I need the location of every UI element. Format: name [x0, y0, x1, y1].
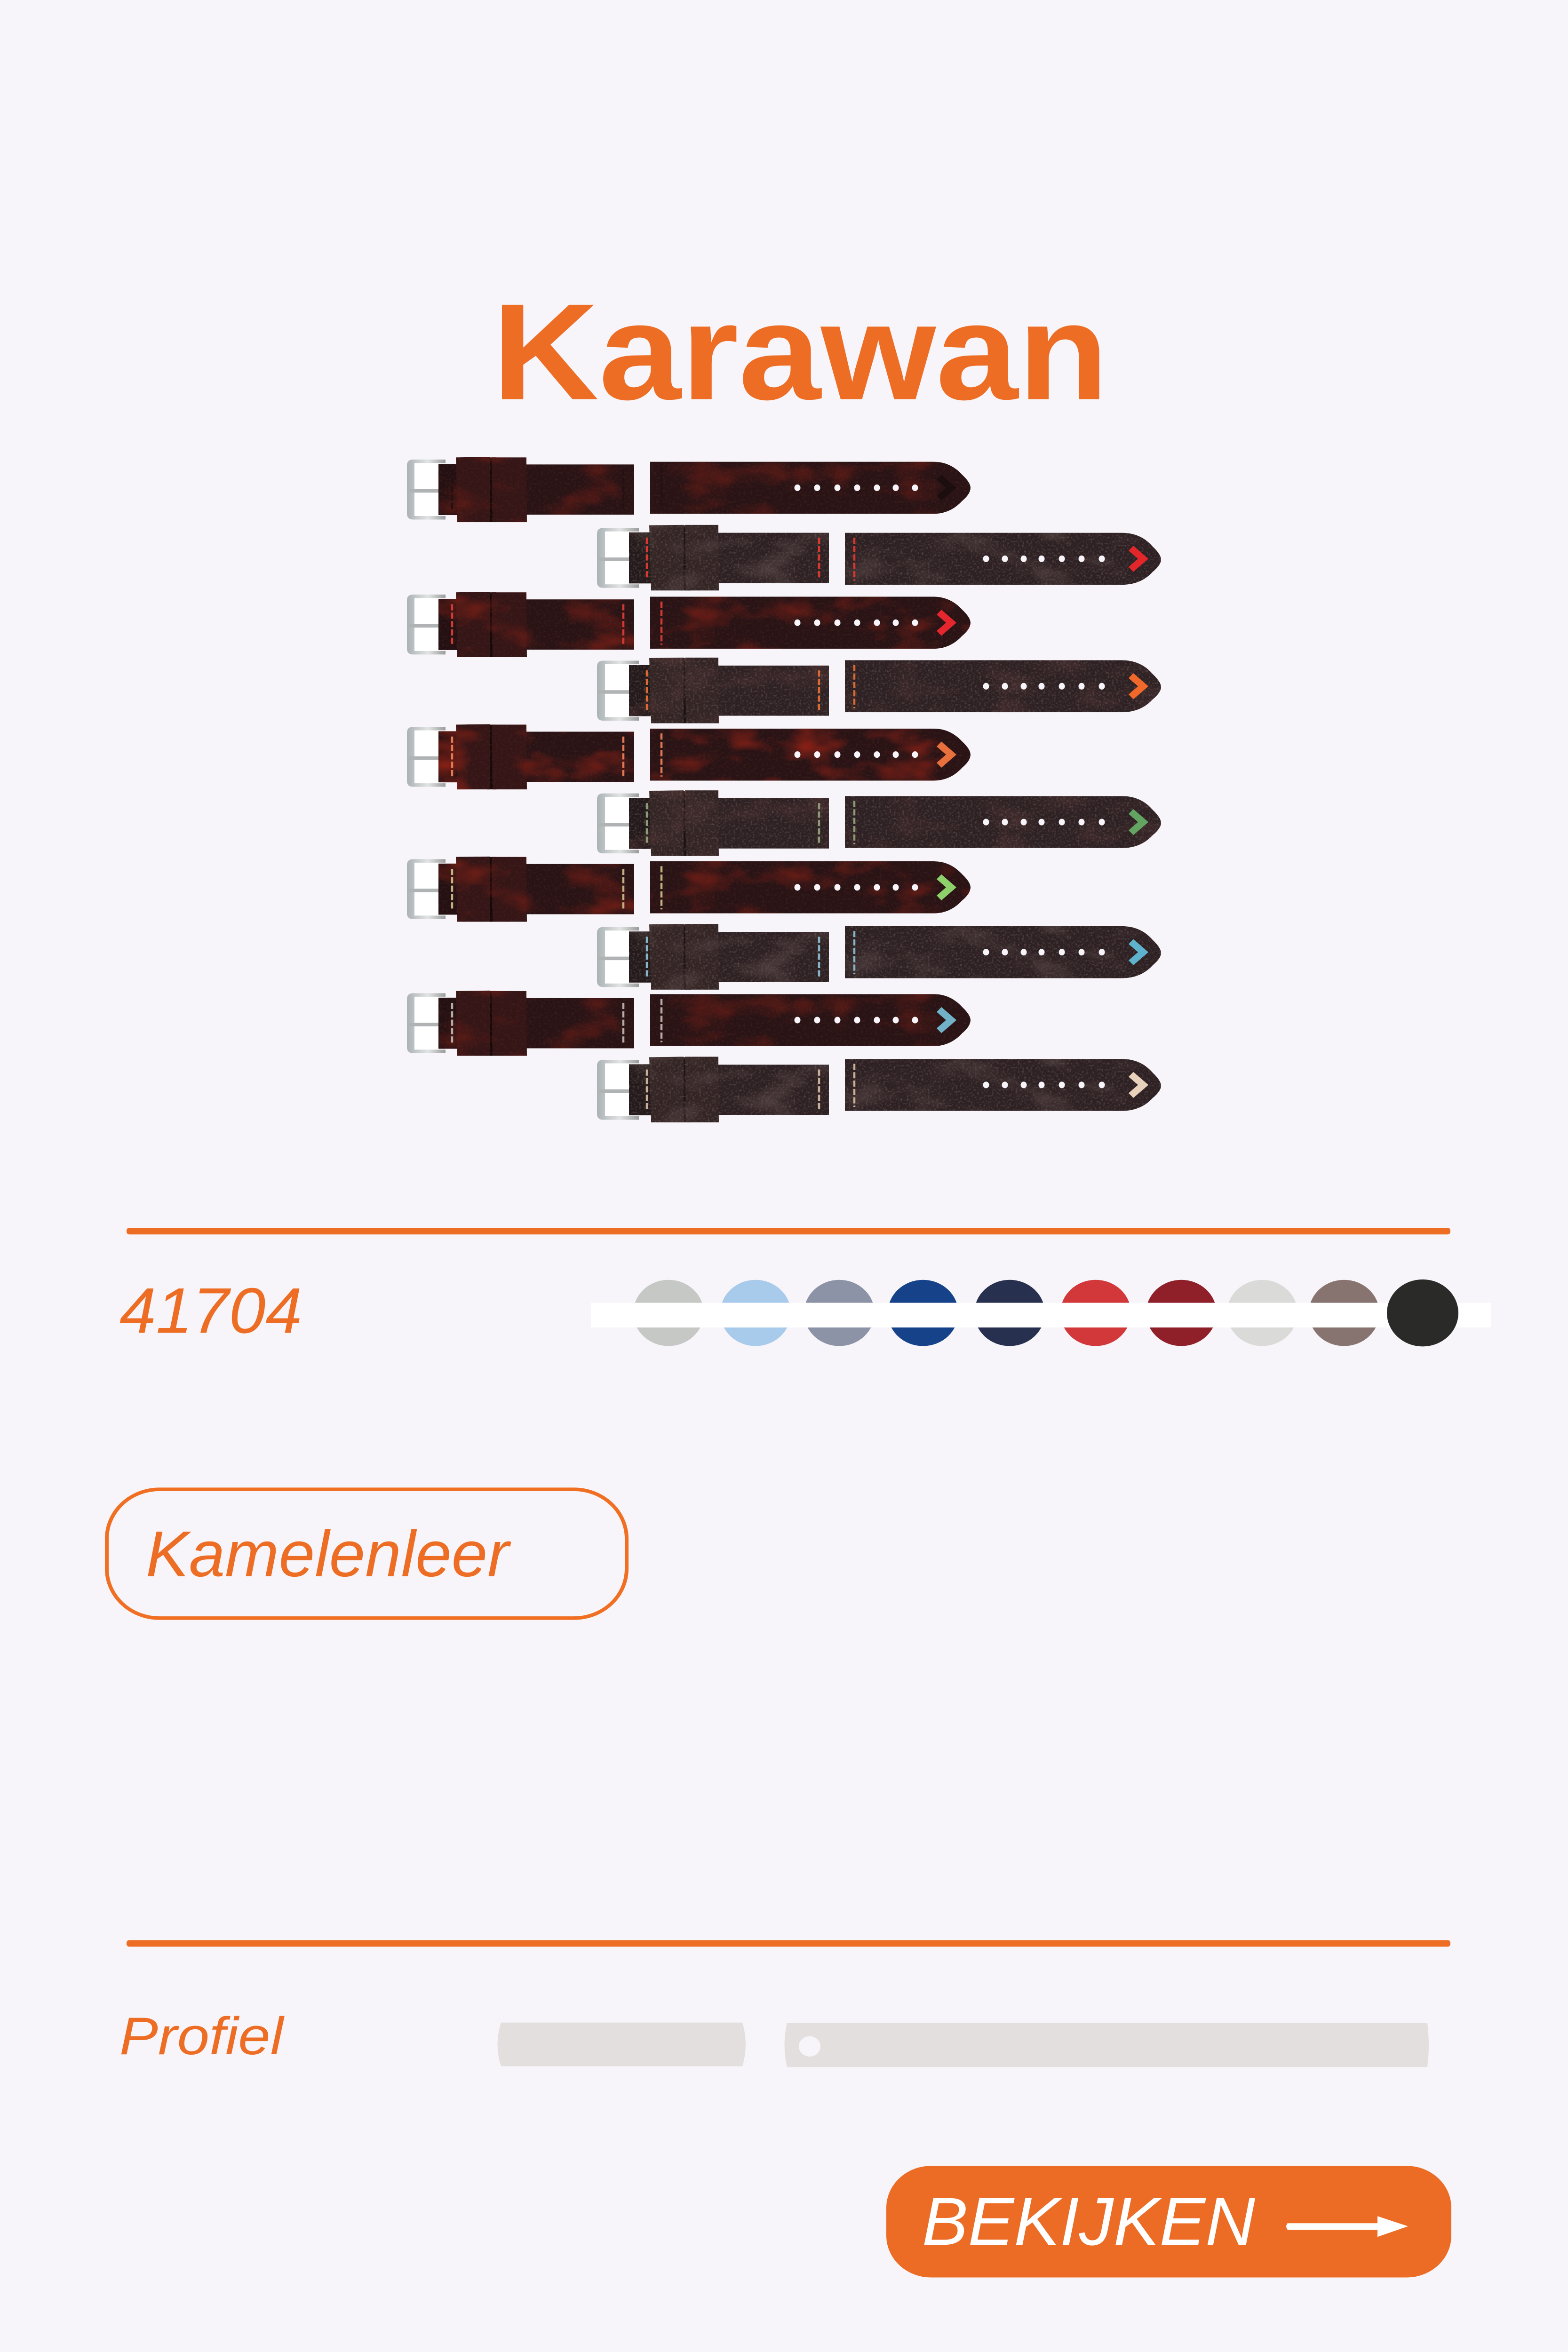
strap 2: red stitching	[597, 525, 1161, 590]
product photo: ten watch straps	[407, 457, 1161, 1122]
bottom divider	[127, 1940, 1450, 1947]
strap 7: light green stitching	[407, 857, 971, 922]
colour swatches	[591, 1279, 1491, 1346]
profile label: Profiel	[119, 2007, 285, 2066]
material tag: Kamelenleer	[146, 1518, 511, 1590]
article number: 41704	[119, 1274, 302, 1346]
strap 9: pale blue stitching	[407, 991, 971, 1056]
strap 4: orange stitching	[597, 658, 1161, 723]
strap 5: coral stitching	[407, 724, 971, 789]
material tag	[107, 1489, 627, 1618]
strap 6: green stitching	[597, 790, 1161, 856]
button: BEKIJKEN	[922, 2184, 1255, 2259]
strap 10: cream stitching	[597, 1057, 1161, 1122]
button	[886, 2166, 1451, 2278]
strap 1: black stitching	[407, 457, 971, 522]
title: Karawan	[492, 275, 1108, 428]
profile diagram	[498, 2023, 1429, 2067]
strap 3: red stitching	[407, 592, 971, 657]
icon: arrow	[1286, 2216, 1408, 2237]
strap 8: blue stitching	[597, 924, 1161, 990]
top divider	[127, 1228, 1450, 1234]
